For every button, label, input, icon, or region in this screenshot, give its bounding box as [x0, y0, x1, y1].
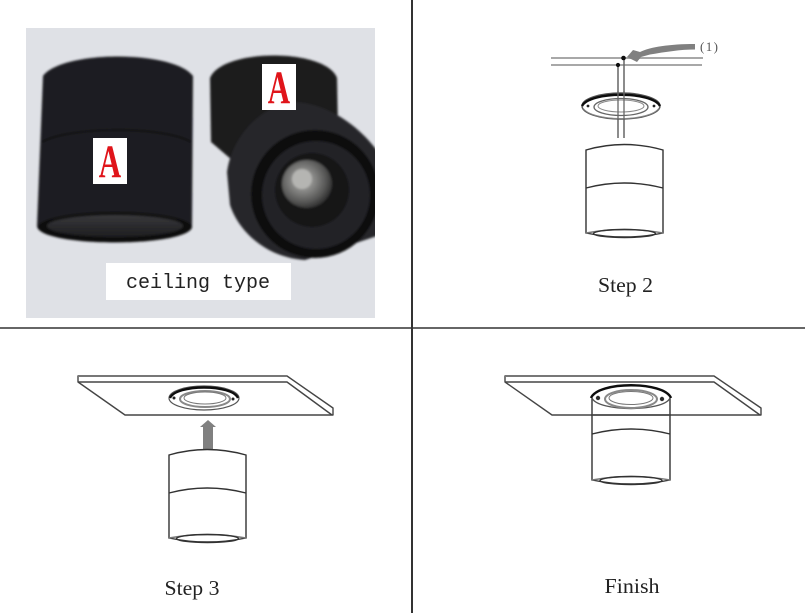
ceiling lines	[551, 58, 703, 65]
caption: Step 3: Step 3	[164, 576, 220, 600]
label: (1): (1)	[700, 39, 718, 54]
panel: finish diagram	[505, 376, 761, 484]
panel: step 2 diagram	[551, 39, 718, 238]
caption: Finish: Finish	[604, 574, 660, 598]
arrow: pointer to wire joint	[627, 44, 695, 62]
icon: lamp cylinder	[586, 144, 663, 238]
arrow: lift lamp upward	[200, 420, 216, 450]
ceiling plate	[505, 376, 761, 415]
photo: adjustable lamp, tilted	[210, 56, 380, 260]
icon: mounting ring	[169, 386, 239, 410]
panel: step 3 diagram	[78, 376, 333, 542]
label: ceiling type: ceiling type	[126, 272, 270, 295]
label: A on straight lamp: A	[99, 136, 121, 188]
caption: Step 2: Step 2	[598, 273, 653, 297]
icon: lamp cylinder	[169, 450, 246, 542]
panel: ceiling type product photo	[26, 28, 380, 318]
wires	[618, 58, 624, 138]
label: A on tilted lamp: A	[268, 62, 290, 114]
label: A on tilted lamp	[262, 62, 296, 114]
label: A on straight lamp	[93, 136, 127, 188]
icon: mounting ring	[582, 91, 660, 119]
photo: surface-mounted lamp, straight	[37, 56, 193, 242]
ceiling plate	[78, 376, 333, 415]
icon: wire joints	[616, 56, 626, 67]
label: ceiling type	[106, 263, 291, 300]
icon: installed lamp	[591, 385, 671, 484]
